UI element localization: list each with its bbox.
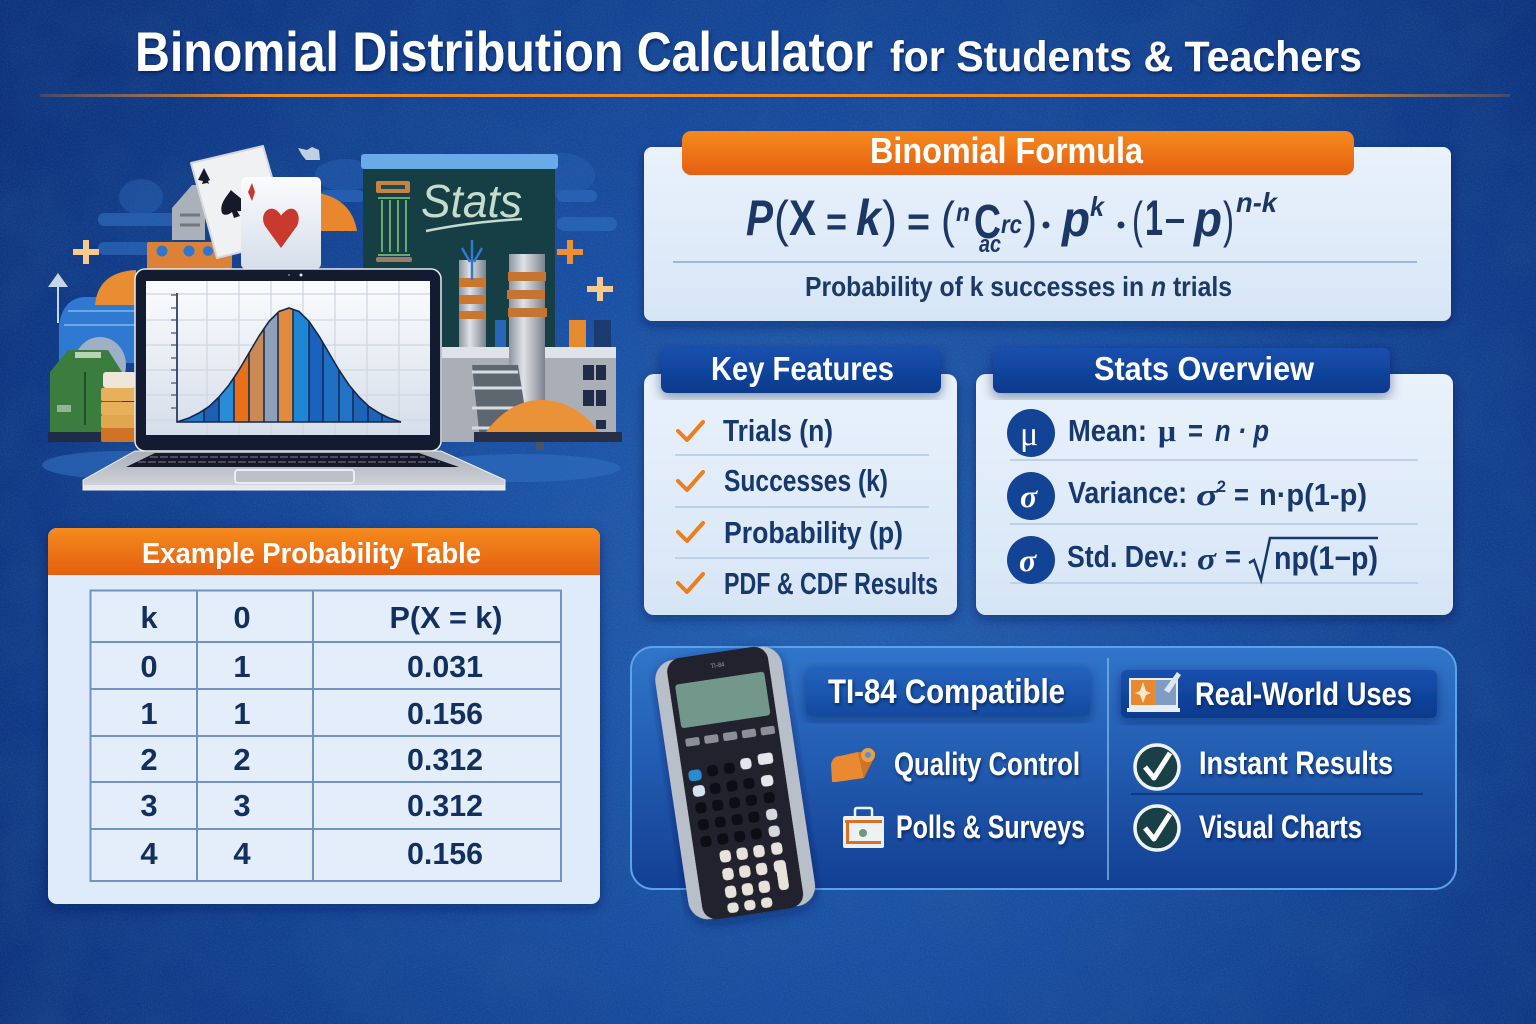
use labels <box>894 745 1393 845</box>
bell curve chart <box>146 281 430 435</box>
orange dome right <box>474 400 622 450</box>
probability table: 3 <box>233 788 251 823</box>
standard deviation row: Std. Dev.: <box>1067 539 1188 574</box>
probability table: P(X = k) <box>390 600 502 635</box>
variance row <box>1007 472 1367 520</box>
title: Binomial Distribution Calculator <box>135 20 873 83</box>
panel: example probability table <box>48 528 600 904</box>
formula: ( <box>774 191 789 247</box>
playing card: heart <box>241 177 321 269</box>
variance row: σ <box>1196 477 1220 512</box>
formula: P <box>746 190 774 246</box>
standard deviation row: σ <box>1197 541 1217 576</box>
feature list: Successes (k) <box>724 463 888 498</box>
chimneys <box>459 240 611 394</box>
probability table: 3 <box>140 788 158 823</box>
probability table: 4 <box>233 836 251 871</box>
probability table <box>90 590 561 881</box>
formula: ) <box>1223 192 1234 248</box>
probability table: 1 <box>140 696 158 731</box>
formula: k <box>1090 191 1105 222</box>
probability table: 0.312 <box>407 788 483 823</box>
formula: n <box>956 197 970 227</box>
probability table: 0.156 <box>407 696 483 731</box>
formula: rc <box>1001 209 1022 239</box>
mean row: Mean: <box>1068 413 1147 448</box>
table header <box>48 528 600 575</box>
laptop <box>83 269 505 490</box>
use labels: Visual Charts <box>1199 809 1362 845</box>
green box <box>50 350 122 432</box>
variance row: Variance: <box>1068 475 1187 510</box>
formula: ) <box>882 191 897 247</box>
formula: n-k <box>1236 187 1278 218</box>
formula: C <box>974 196 1001 249</box>
formula header <box>682 130 1354 175</box>
formula: ) <box>1023 192 1037 248</box>
mean row: n · p <box>1215 413 1269 448</box>
calculator keys <box>687 752 784 848</box>
probability table: 1 <box>233 696 251 731</box>
blue machine <box>59 297 136 393</box>
formula: k <box>856 190 883 246</box>
key features header <box>661 348 941 393</box>
mean row: μ <box>1158 413 1176 448</box>
variance row: 2 <box>1217 477 1226 496</box>
feature list: Trials (n) <box>723 413 833 448</box>
formula: p <box>1192 191 1222 247</box>
mean row: = <box>1188 413 1203 448</box>
panel: binomial formula <box>644 130 1451 321</box>
probability table: 0.312 <box>407 742 483 777</box>
formula <box>746 187 1278 258</box>
title divider <box>40 94 1510 97</box>
formula: ac <box>979 231 1001 258</box>
variance row: σ <box>1020 478 1038 514</box>
use labels: Quality Control <box>894 746 1080 782</box>
variance row: = <box>1234 477 1249 512</box>
probability table: 1 <box>233 649 251 684</box>
orange dome left <box>95 270 136 305</box>
feature list: PDF & CDF Results <box>724 566 938 601</box>
factory building <box>442 347 616 442</box>
probability table: 0 <box>140 649 158 684</box>
panel: stats overview <box>976 348 1453 615</box>
chalkboard: Stats <box>421 175 522 227</box>
mean row: μ <box>1020 416 1038 453</box>
icon: polls briefcase <box>843 808 884 848</box>
TI-84 tab: TI-84 Compatible <box>828 673 1065 711</box>
probability table: 0.031 <box>407 649 483 684</box>
formula: = <box>907 200 930 244</box>
small paper scrap <box>298 147 320 160</box>
TI-84 calculator: TI-84 <box>710 662 726 670</box>
orange box with blue dots <box>147 242 232 269</box>
key features header: Key Features <box>711 350 894 387</box>
standard deviation row: σ <box>1019 542 1037 578</box>
icon: quality control <box>831 748 875 782</box>
feature list: Probability (p) <box>724 515 903 550</box>
background clouds <box>42 153 620 482</box>
probability table: 4 <box>140 836 158 871</box>
stats overview header <box>993 348 1390 393</box>
standard deviation row <box>1007 536 1378 584</box>
title: for Students & Teachers <box>890 33 1362 81</box>
panel: key features <box>644 348 957 615</box>
probability table: 2 <box>140 742 158 777</box>
plus signs <box>73 240 613 301</box>
feature list <box>678 413 938 601</box>
use labels: Polls & Surveys <box>896 809 1085 845</box>
book stack <box>101 372 136 442</box>
panel: calculator and real-world uses <box>631 643 1456 923</box>
formula: ( <box>941 192 955 248</box>
probability table: 0 <box>233 600 251 635</box>
probability table: 0.156 <box>407 836 483 871</box>
dark base left <box>48 432 108 442</box>
standard deviation row: np(1−p) <box>1274 540 1378 576</box>
formula: X <box>789 190 816 246</box>
real-world uses tab: Real-World Uses <box>1195 676 1412 712</box>
variance row: n·p(1-p) <box>1259 477 1367 512</box>
formula caption: Probability of k successes in n trials <box>805 271 1232 302</box>
formula header: Binomial Formula <box>870 130 1144 171</box>
TI-84 tab <box>806 667 1090 716</box>
table header: Example Probability Table <box>142 538 481 570</box>
icon: real-world screen <box>1127 672 1181 712</box>
illustration: laptop with bell curve and stats scene <box>42 146 622 490</box>
probability table: k <box>140 600 158 635</box>
probability table: 2 <box>233 742 251 777</box>
playing card: ace of spades <box>191 146 290 258</box>
formula: ( <box>1132 192 1143 248</box>
formula: 1 <box>1145 190 1163 246</box>
stats overview header: Stats Overview <box>1094 350 1314 387</box>
formula: p <box>1060 191 1090 247</box>
title <box>135 20 1362 83</box>
grey building <box>172 185 205 240</box>
formula: = <box>826 200 847 244</box>
check icons <box>678 422 703 592</box>
icon: check circle visual charts <box>1135 806 1179 850</box>
real-world uses tab <box>1121 670 1437 718</box>
mean row <box>1007 409 1269 457</box>
chalkboard <box>361 154 558 349</box>
TI-84 calculator <box>652 643 818 923</box>
orange umbrella <box>319 193 357 231</box>
up arrow <box>48 273 68 323</box>
use labels: Instant Results <box>1199 745 1393 781</box>
icon: check circle instant results <box>1135 745 1179 789</box>
standard deviation row: = <box>1225 539 1241 574</box>
